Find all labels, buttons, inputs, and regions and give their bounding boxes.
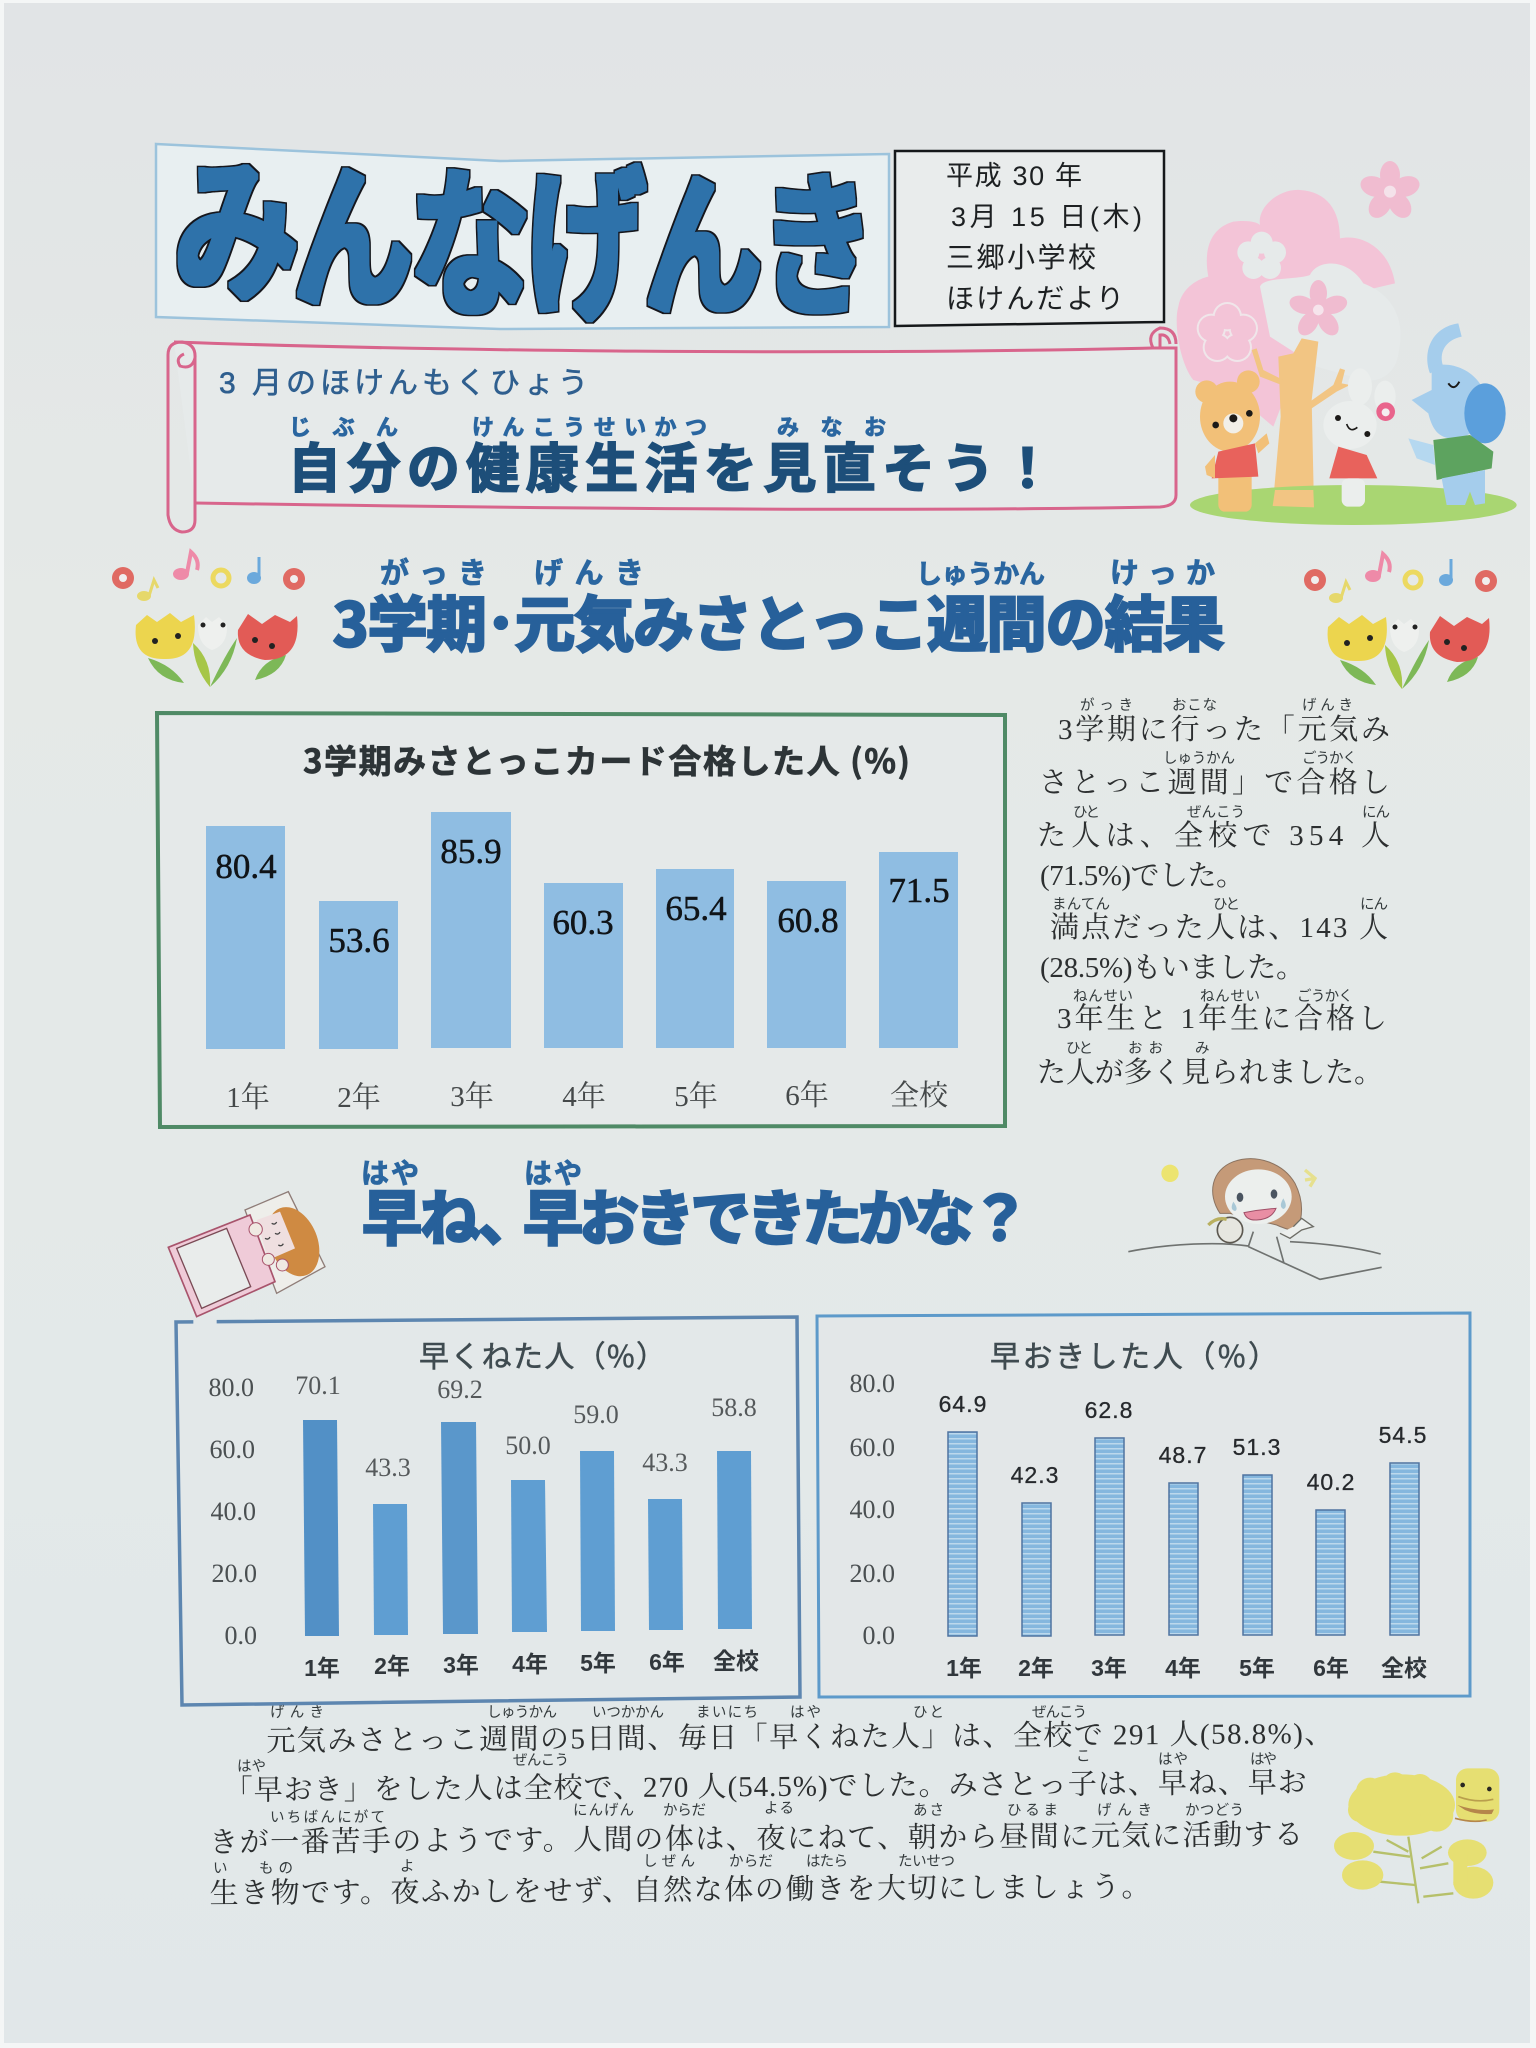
furigana: しゅうかん [1163,747,1235,768]
value labels: 53.6 [328,921,390,960]
value labels: 62.8 [1085,1397,1133,1423]
heading furigana: げんき [534,550,644,592]
heading text: 3学期･元気みさとっこ週間の結果 [333,577,1224,664]
value labels: 85.9 [440,832,502,871]
category labels: 4年 [1165,1655,1201,1681]
scroll subtitle: 3 月のほけんもくひょう [219,367,588,400]
category labels: 4年 [562,1080,606,1113]
furigana: からだ [663,1799,706,1820]
value labels: 80.4 [215,847,277,886]
value labels [939,1391,1427,1495]
scroll headline: 自分の健康生活を見直そう！ [288,427,1054,503]
value labels: 42.3 [1011,1462,1059,1488]
furigana: もの [259,1857,293,1878]
rabbit [1323,368,1396,507]
body lines: 「早おき」をした人は全校で、270 人(54.5%)でした。みさとっ子は、早ね、早お [224,1766,1307,1807]
furigana: よ [400,1855,414,1876]
chart title: 3学期みさとっこカード合格した人 (%) [303,735,910,783]
furigana: ごうかく [1297,985,1353,1006]
furigana: しゅうかん [487,1701,557,1722]
body lines: さとっこ週間」で合格し [1039,766,1390,799]
value labels: 51.3 [1233,1434,1281,1460]
category labels: 1年 [946,1655,982,1681]
y axis labels: 80.0 [850,1369,895,1398]
furigana: はや [237,1755,266,1776]
scroll outline [168,328,1176,532]
value labels: 64.9 [939,1391,987,1417]
furigana: ぜんこう [1032,1701,1087,1722]
icon: tulips and music notes right [1304,554,1497,689]
y axis labels: 80.0 [208,1373,254,1402]
category labels: 3年 [1091,1655,1127,1681]
heading furigana: はや [361,1152,419,1192]
furigana: ひと [1066,1037,1093,1058]
body lines: 3年生と 1年生に合格し [1057,1002,1387,1035]
body lines: た人は、全校で 354 人 [1037,819,1390,852]
furigana: ねんせい [1200,985,1260,1006]
category labels [226,1079,949,1114]
scroll furigana [289,410,886,442]
category labels [304,1648,759,1681]
furigana: い [213,1857,228,1878]
value labels: 43.3 [365,1453,411,1482]
panel: card pass rate bar chart [157,713,1005,1127]
furigana: こ [1076,1745,1090,1766]
furigana: げんき [270,1701,324,1722]
title banner: み [174,108,299,332]
category labels: 全校 [890,1079,949,1112]
value labels: 54.5 [1379,1422,1427,1448]
category labels: 5年 [1239,1655,1275,1681]
furigana: ぜんこう [513,1749,569,1770]
outlined blossom left [1197,302,1258,362]
bars [206,812,958,1049]
y axis labels: 60.0 [210,1435,255,1464]
category labels: 2年 [337,1081,381,1114]
value labels: 69.2 [437,1375,483,1404]
category labels: 3年 [443,1652,479,1678]
body lines: 元気みさとっこ週間の5日間、毎日「早くねた人」は、全校で 291 人(58.8%)、 [266,1717,1334,1758]
furigana: ひと [1213,893,1240,914]
body lines [1037,713,1390,1089]
blossom top right [1358,161,1422,222]
date box: 平成 30 年 [946,161,1082,191]
body lines: (28.5%)もいました。 [1040,952,1305,984]
furigana: たいせつ [898,1850,955,1871]
title banner: な [410,116,530,348]
panel: woke up early bar chart [817,1313,1470,1697]
heading text: 、 [478,1171,538,1258]
section heading: early to bed [361,1152,1030,1258]
title banner: ん [644,122,762,347]
value labels: 71.5 [888,871,950,910]
value labels: 58.8 [711,1393,757,1422]
bars [303,1420,752,1636]
elephant [1408,323,1506,505]
body lines: た人が多く見られました。 [1037,1056,1383,1089]
icon: sleeping child in bed [168,1192,329,1326]
title banner: げ [526,113,646,352]
y axis labels: 20.0 [212,1559,257,1588]
panel: went to bed early bar chart [176,1317,800,1705]
value labels: 50.0 [505,1431,551,1460]
category labels: 5年 [580,1650,616,1676]
y axis labels [850,1369,895,1650]
category labels: 全校 [1381,1655,1427,1681]
date box: 三郷小学校 [946,242,1096,273]
body lines: 3学期に行った「元気み [1058,713,1390,746]
text block: results explanation [1037,694,1390,1089]
bars [948,1432,1419,1636]
heading furigana: しゅうかん [916,554,1045,591]
title banner [156,108,889,352]
value labels [295,1371,757,1482]
scroll furigana: けんこうせいかつ [472,410,707,442]
y axis labels: 0.0 [862,1621,895,1650]
furigana: み [1195,1037,1210,1058]
furigana: よる [764,1797,794,1818]
icon: tulips and music notes left [112,552,305,687]
furigana: がっき [1080,694,1133,715]
furigana: ひと [913,1701,944,1722]
section heading: results [333,550,1224,664]
date box: 3月 15 日(木) [951,202,1142,232]
heading furigana: はや [524,1152,582,1192]
furigana: げんき [1302,694,1353,715]
bear [1195,370,1269,512]
category labels: 4年 [512,1651,548,1677]
value labels [215,832,950,960]
pink blossom center [1287,280,1350,339]
furigana: にん [1360,893,1388,914]
furigana: いちばんにがて [270,1806,385,1827]
body lines: (71.5%)でした。 [1040,860,1245,892]
furigana: ぜんこう [1187,801,1245,822]
icon: waking girl with alarm clock [1128,1159,1382,1279]
furigana: からだ [729,1850,773,1871]
icon: rapeseed flower character [1334,1768,1499,1903]
furigana: ひと [1073,801,1100,822]
y axis labels: 0.0 [224,1621,257,1650]
y axis labels: 20.0 [850,1559,895,1588]
category labels: 1年 [304,1655,340,1681]
heading text: 早おきできたかな？ [523,1171,1030,1258]
value labels: 60.8 [777,901,839,940]
body lines: 生き物です。夜ふかしをせず、自然な体の働きを大切にしましょう。 [209,1870,1151,1910]
body lines: きが一番苦手のようです。人間の体は、夜にねて、朝から昼間に元気に活動する [209,1818,1303,1859]
category labels: 6年 [649,1649,685,1675]
body lines: 満点だった人は、143 人 [1050,911,1388,944]
furigana: あさ [913,1799,944,1820]
furigana: しぜん [643,1850,695,1871]
category labels: 2年 [1018,1655,1054,1681]
pink canopy [1177,190,1395,427]
y axis labels [208,1373,257,1650]
furigana: いつかかん [592,1701,664,1722]
heading furigana [380,550,1215,592]
furigana: ごうかく [1302,747,1357,768]
date box [895,151,1164,326]
heading furigana: けっか [1110,550,1215,592]
furigana: はたら [806,1850,848,1871]
scroll furigana: みなお [777,410,886,442]
pale canopy [1260,263,1400,381]
chart title: 早おきした人（%） [990,1332,1278,1376]
value labels: 40.2 [1307,1469,1355,1495]
face on the flower [1455,1783,1494,1821]
heading furigana: がっき [380,550,487,592]
furigana: にんげん [573,1799,634,1820]
category labels [946,1655,1427,1681]
furigana: おお [1128,1037,1163,1058]
furigana: まいにち [696,1701,758,1722]
illustration: cherry tree and animals [1177,161,1517,525]
title banner: ん [293,114,413,339]
furigana [213,1701,1277,1878]
y axis labels: 40.0 [850,1495,895,1524]
value labels: 48.7 [1159,1442,1207,1468]
scroll furigana: じぶん [289,410,398,442]
furigana: まんてん [1052,893,1110,914]
value labels: 65.4 [665,889,727,928]
value labels: 70.1 [295,1371,341,1400]
heading text: 早ね [362,1171,480,1258]
category labels: 5年 [674,1080,718,1113]
furigana [1052,694,1390,1058]
monthly goal scroll [168,328,1176,532]
grass [1190,485,1517,525]
category labels: 2年 [374,1653,410,1679]
furigana: ねんせい [1073,985,1133,1006]
value labels: 60.3 [552,903,614,942]
furigana: はや [790,1701,821,1722]
y axis labels: 40.0 [210,1497,256,1526]
furigana: ひるま [1007,1799,1058,1820]
furigana: にん [1362,801,1390,822]
text block: sleep summary [208,1701,1335,1910]
furigana: はや [1250,1748,1277,1769]
trunk and branches [1252,338,1350,507]
category labels: 3年 [450,1080,494,1113]
value labels: 43.3 [642,1448,688,1477]
category labels: 6年 [1313,1655,1349,1681]
heading furigana [361,1152,582,1192]
white blossom [1237,232,1286,279]
chart title: 早くねた人（%） [419,1332,666,1376]
category labels: 全校 [713,1648,759,1674]
title banner: き [760,124,875,347]
furigana: はや [1158,1748,1188,1769]
category labels: 1年 [226,1081,270,1114]
furigana: おこな [1172,694,1217,715]
body lines [208,1717,1335,1910]
date box: ほけんだより [946,283,1124,314]
furigana: げんき [1097,1799,1152,1820]
category labels: 6年 [785,1079,829,1112]
value labels: 59.0 [573,1400,619,1429]
furigana: かつどう [1185,1799,1244,1820]
y axis labels: 60.0 [850,1433,895,1462]
